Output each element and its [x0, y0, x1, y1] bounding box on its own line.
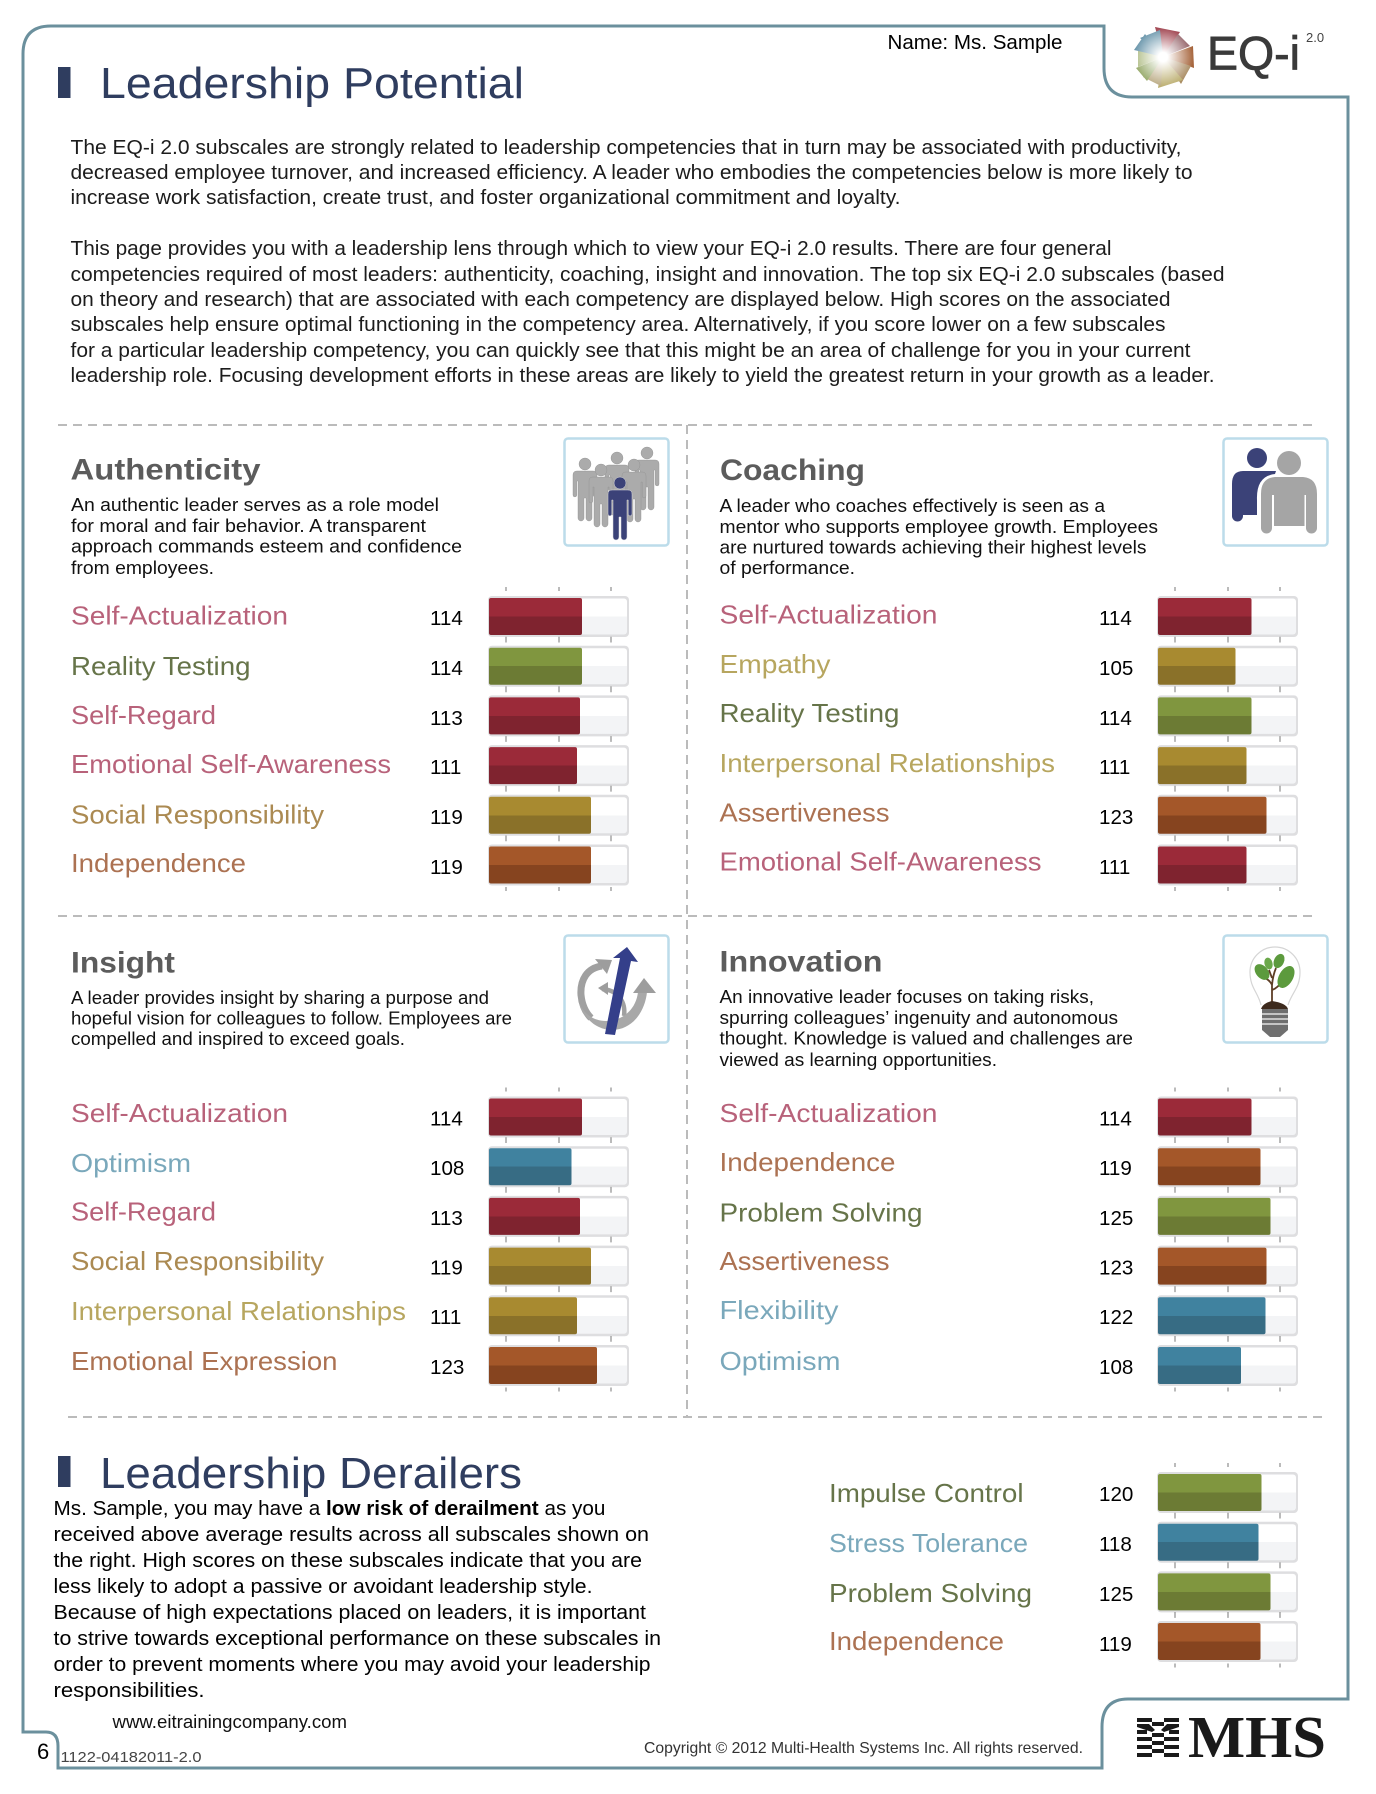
row: Assertiveness: 123: [1099, 1256, 1133, 1279]
row: Reality Testing: Reality Testing: [720, 698, 900, 728]
row: Independence: Independence: [829, 1626, 1004, 1656]
description: from employees.: [71, 558, 214, 578]
paragraph 2: [70, 238, 1224, 387]
row: Problem Solving: 125: [1099, 1583, 1133, 1606]
row: Emotional Expression: Emotional Expression: [71, 1346, 338, 1376]
row: Independence: [71, 836, 629, 891]
row: Self-Actualization: Self-Actualization: [71, 600, 288, 630]
title marker: [58, 67, 70, 98]
panel: Authenticity: [70, 438, 668, 891]
row: Problem Solving: 125: [1099, 1207, 1133, 1230]
row: Social Responsibility: 119: [430, 1256, 463, 1279]
paragraph 2: for a particular leadership competency, you can quickly see that this might be an area of challenge for you in your current: [70, 340, 1191, 362]
row: Flexibility: 122: [1099, 1306, 1133, 1329]
row: Self-Actualization: Self-Actualization: [71, 1098, 288, 1128]
row: Flexibility: [720, 1286, 1298, 1342]
heading: Coaching: [720, 454, 865, 487]
row: Empathy: Empathy: [720, 649, 830, 679]
row: Impulse Control: Impulse Control: [829, 1478, 1024, 1508]
row: Optimism: [71, 1137, 629, 1193]
icon: pinwheel: [1134, 27, 1194, 88]
row: Optimism: [720, 1336, 1298, 1392]
row: Self-Regard: [71, 686, 629, 742]
row: Stress Tolerance: [829, 1513, 1298, 1568]
row: Self-Actualization: 114: [430, 607, 463, 630]
row: Empathy: [720, 637, 1298, 692]
row: Interpersonal Relationships: 111: [430, 1306, 461, 1329]
derailers text: to strive towards exceptional performance on these subscales in: [54, 1628, 661, 1650]
row: Interpersonal Relationships: Interpersonal Relationships: [71, 1296, 406, 1326]
row: Self-Regard: 113: [430, 707, 463, 730]
row: Assertiveness: 123: [1099, 806, 1133, 829]
row: Self-Regard: Self-Regard: [71, 1196, 216, 1226]
row: Reality Testing: 114: [430, 657, 463, 680]
row: Self-Actualization: [720, 587, 1298, 642]
row: Independence: Independence: [720, 1147, 896, 1177]
title: Leadership Potential: [100, 59, 524, 108]
row: Independence: 119: [1099, 1633, 1132, 1656]
row: Reality Testing: 114: [1099, 707, 1132, 730]
row: Independence: [720, 1137, 1298, 1193]
paragraph 2: This page provides you with a leadership lens through which to view your EQ-i 2.0 results. There are four general: [70, 238, 1112, 260]
row: Independence: Independence: [71, 848, 246, 878]
row: Optimism: Optimism: [720, 1346, 840, 1376]
row: Emotional Self-Awareness: 111: [430, 756, 461, 779]
logo version: 2.0: [1306, 30, 1324, 45]
row: Empathy: 105: [1099, 657, 1133, 680]
row: Independence: 119: [430, 856, 463, 879]
row: Self-Actualization: Self-Actualization: [720, 1098, 938, 1128]
derailers text: received above average results across all subscales shown on: [54, 1524, 649, 1546]
heading: Authenticity: [70, 454, 261, 486]
row: Optimism: 108: [1099, 1356, 1133, 1379]
panel: Coaching: [720, 438, 1328, 891]
row: Interpersonal Relationships: 111: [1099, 756, 1130, 779]
row: Interpersonal Relationships: Interpersonal Relationships: [720, 748, 1055, 778]
footer: [37, 1712, 1083, 1766]
description: [720, 987, 1133, 1070]
derailers text: the right. High scores on these subscales indicate that you are: [54, 1550, 642, 1572]
row: Interpersonal Relationships: [71, 1286, 629, 1342]
row: Emotional Self-Awareness: Emotional Self-Awareness: [720, 846, 1042, 876]
derailers text: Because of high expectations placed on leaders, it is important: [54, 1602, 646, 1624]
name label: Name: Ms. Sample: [888, 32, 1062, 54]
heading: Innovation: [720, 946, 882, 978]
row: Assertiveness: Assertiveness: [720, 1246, 890, 1276]
copyright: Copyright © 2012 Multi-Health Systems Inc. All rights reserved.: [644, 1740, 1083, 1757]
logo: EQ-i 2.0: [1134, 26, 1324, 88]
row: Self-Actualization: [71, 1088, 629, 1143]
derailers text: [54, 1497, 661, 1702]
description: are nurtured towards achieving their highest levels: [720, 538, 1146, 558]
description: [71, 988, 512, 1049]
row: Self-Actualization: [71, 587, 629, 642]
heading: Insight: [71, 946, 175, 980]
row: Social Responsibility: Social Responsibility: [71, 800, 324, 830]
description: An authentic leader serves as a role model: [71, 495, 439, 515]
wordmark: MHS: [1188, 1704, 1326, 1770]
icon: group of people: [564, 438, 668, 546]
icon: arrows: [564, 936, 668, 1042]
row: Flexibility: Flexibility: [720, 1295, 838, 1325]
icon: coach and mentee: [1224, 438, 1328, 546]
row: Problem Solving: Problem Solving: [829, 1578, 1032, 1608]
paragraph 1: The EQ-i 2.0 subscales are strongly related to leadership competencies that in turn may be associated with productivity,: [70, 137, 1182, 159]
paragraph 1: [70, 137, 1192, 209]
row: Interpersonal Relationships: [720, 736, 1298, 792]
row: Problem Solving: [720, 1187, 1298, 1242]
paragraph 1: decreased employee turnover, and increased efficiency. A leader who embodies the competencies below is more likely to: [70, 162, 1192, 184]
document code: 1122-04182011-2.0: [60, 1749, 202, 1766]
derailers text: less likely to adopt a passive or avoidant leadership style.: [54, 1576, 592, 1598]
row: Self-Actualization: 114: [1099, 1107, 1132, 1130]
row: Emotional Expression: [71, 1336, 629, 1392]
row: Impulse Control: 120: [1099, 1483, 1133, 1506]
derailers text: responsibilities.: [54, 1680, 204, 1702]
description: thought. Knowledge is valued and challenges are: [720, 1028, 1133, 1048]
row: Independence: [829, 1612, 1298, 1668]
row: Reality Testing: Reality Testing: [71, 651, 250, 681]
row: Problem Solving: Problem Solving: [720, 1198, 922, 1228]
emblem: [1137, 1718, 1179, 1757]
paragraph 2: leadership role. Focusing development efforts in these areas are likely to yield the greatest return in your growth as a leader.: [70, 365, 1214, 387]
paragraph 2: subscales help ensure optimal functioning in the competency area. Alternatively, if you score lower on a few subscales: [70, 314, 1166, 336]
row: Assertiveness: [720, 786, 1298, 841]
description: spurring colleagues’ ingenuity and autonomous: [720, 1008, 1118, 1028]
description: approach commands esteem and confidence: [71, 536, 462, 556]
row: Assertiveness: Assertiveness: [720, 798, 890, 828]
panel: Insight: [71, 936, 668, 1392]
description: of performance.: [720, 558, 855, 578]
heading: Leadership Derailers: [100, 1449, 522, 1498]
description: mentor who supports employee growth. Employees: [720, 517, 1158, 537]
description: [720, 496, 1158, 578]
row: Optimism: Optimism: [71, 1148, 191, 1178]
row: Emotional Self-Awareness: Emotional Self-Awareness: [71, 749, 391, 779]
intro text: [70, 137, 1224, 387]
paragraph 1: increase work satisfaction, create trust, and foster organizational commitment and loyalty.: [70, 187, 901, 209]
row: Social Responsibility: 119: [430, 806, 463, 829]
description: hopeful vision for colleagues to follow. Employees are: [71, 1008, 512, 1028]
row: Self-Actualization: Self-Actualization: [720, 600, 938, 630]
description: for moral and fair behavior. A transparent: [71, 516, 426, 536]
page number: 6: [37, 1739, 49, 1764]
panel: Leadership Derailers: [54, 1449, 1298, 1702]
row: Optimism: 108: [430, 1157, 464, 1180]
row: Assertiveness: [720, 1237, 1298, 1292]
derailers text: order to prevent moments where you may avoid your leadership: [54, 1654, 650, 1676]
description: A leader who coaches effectively is seen as a: [720, 496, 1106, 516]
derailers text: Ms. Sample, you may have a low risk of derailment as you: [54, 1497, 605, 1520]
website: www.eitrainingcompany.com: [111, 1712, 347, 1732]
row: Self-Actualization: 114: [1099, 607, 1132, 630]
row: Self-Regard: [71, 1187, 629, 1242]
paragraph 2: on theory and research) that are associated with each competency are displayed below. High scores on the associated: [70, 289, 1170, 311]
paragraph 2: competencies required of most leaders: authenticity, coaching, insight and innovation. The top six EQ-i 2.0 subscales (based: [70, 264, 1224, 286]
row: Reality Testing: [71, 637, 629, 692]
row: Emotional Self-Awareness: [71, 736, 629, 792]
description: viewed as learning opportunities.: [720, 1050, 997, 1070]
row: Independence: 119: [1099, 1157, 1132, 1180]
description: [71, 495, 462, 578]
row: Self-Regard: Self-Regard: [71, 700, 216, 730]
row: Emotional Expression: 123: [430, 1356, 464, 1379]
row: Emotional Self-Awareness: 111: [1099, 856, 1130, 879]
row: Problem Solving: [829, 1562, 1298, 1618]
row: Social Responsibility: [71, 786, 629, 841]
logo wordmark: EQ-i: [1207, 26, 1300, 80]
row: Self-Regard: 113: [430, 1207, 463, 1230]
icon: light bulb with plant: [1224, 936, 1328, 1042]
row: Reality Testing: [720, 686, 1298, 742]
description: An innovative leader focuses on taking risks,: [720, 987, 1094, 1007]
row: Social Responsibility: Social Responsibility: [71, 1246, 324, 1276]
row: Self-Actualization: [720, 1088, 1298, 1143]
row: Self-Actualization: 114: [430, 1107, 463, 1130]
row: Stress Tolerance: 118: [1099, 1533, 1132, 1556]
row: Emotional Self-Awareness: [720, 836, 1298, 891]
row: Stress Tolerance: Stress Tolerance: [829, 1528, 1028, 1558]
row: Impulse Control: [829, 1463, 1298, 1518]
panel: Innovation: [720, 936, 1328, 1392]
logo: MHS: [1137, 1704, 1326, 1770]
description: compelled and inspired to exceed goals.: [71, 1029, 405, 1049]
section marker: [58, 1456, 70, 1487]
row: Social Responsibility: [71, 1237, 629, 1292]
description: A leader provides insight by sharing a purpose and: [71, 988, 489, 1008]
